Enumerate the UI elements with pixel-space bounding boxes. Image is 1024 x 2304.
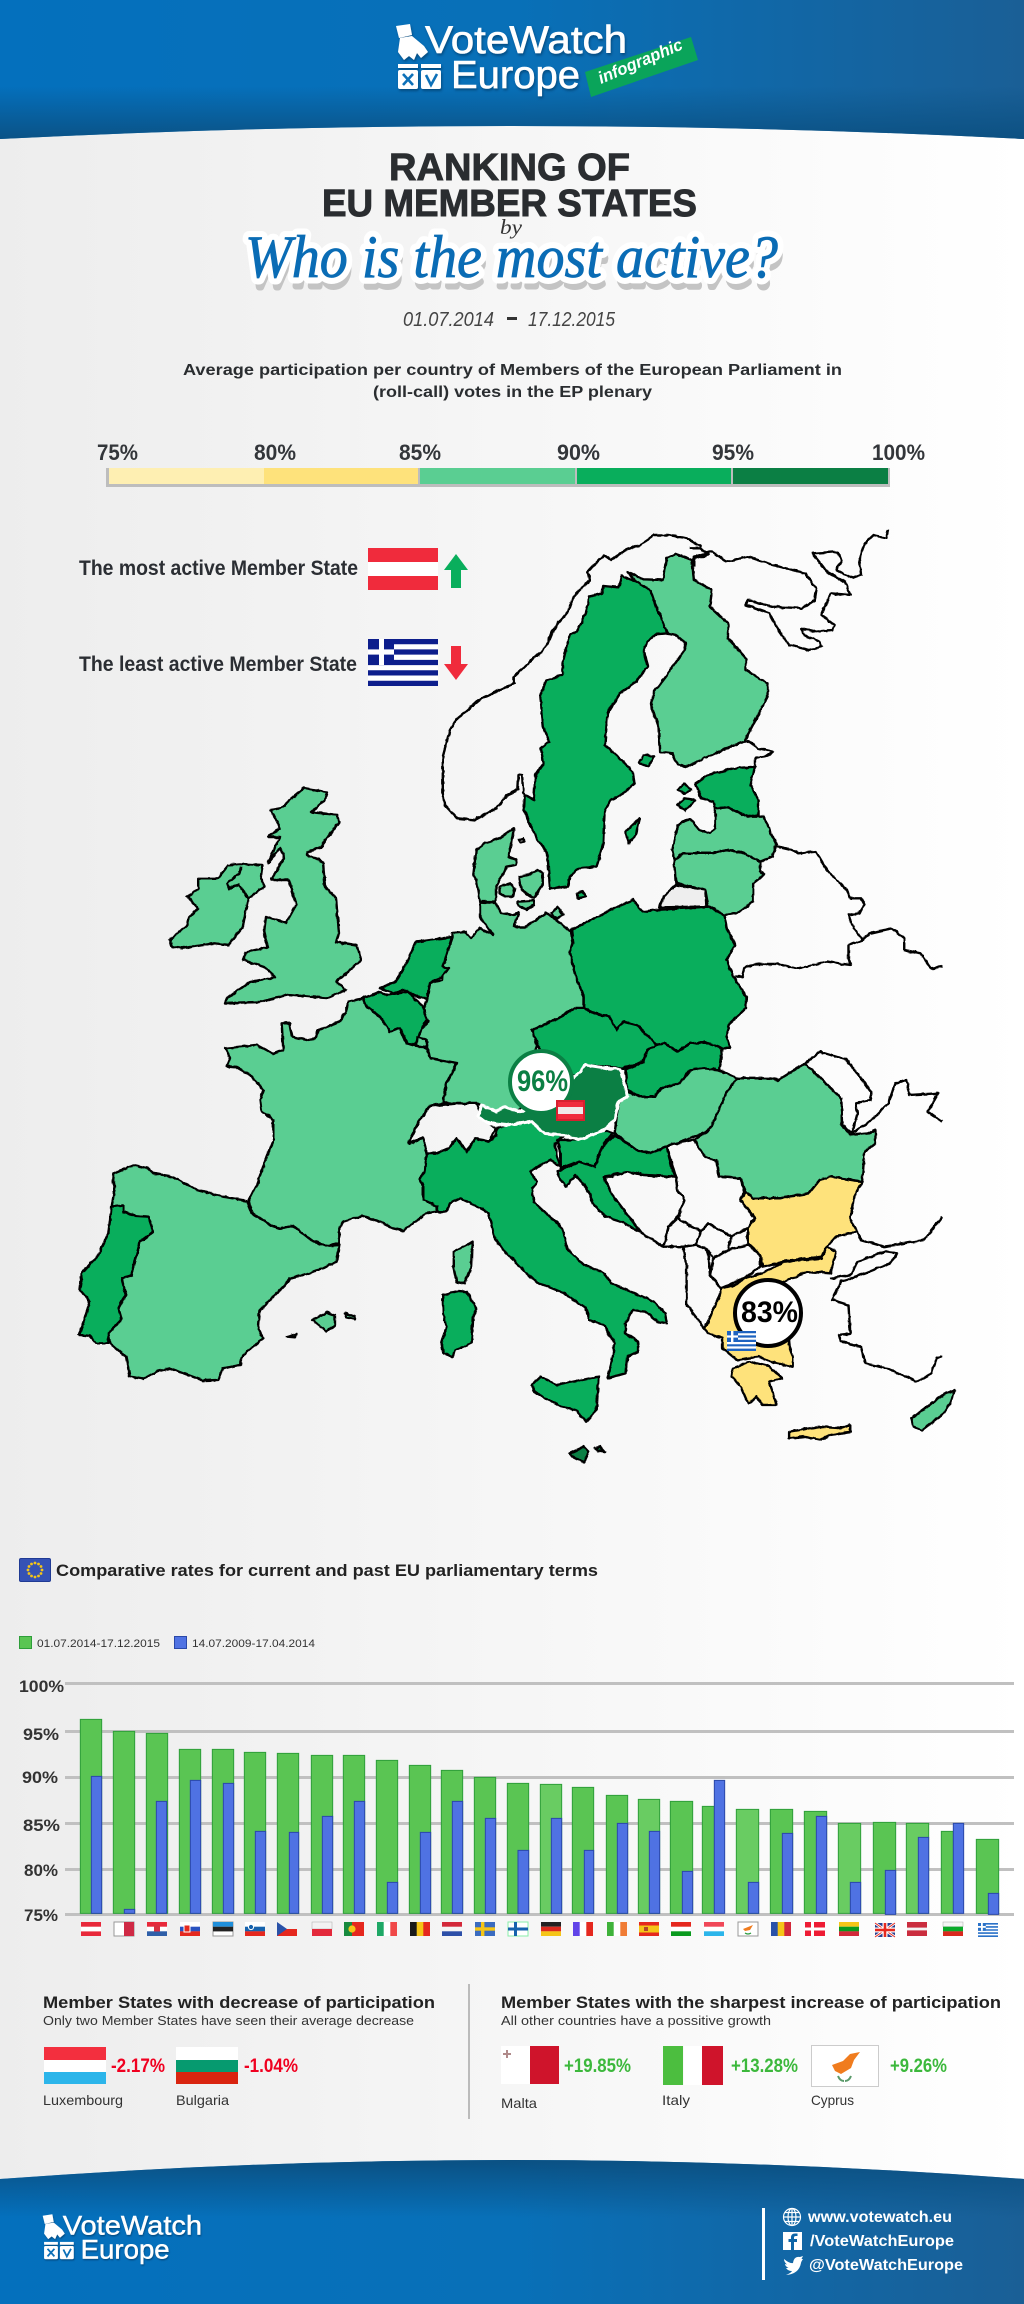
region: Peloponnese — [732, 1362, 782, 1405]
least active member state row — [79, 639, 468, 686]
value: Malta: +19.85% — [564, 2056, 631, 2077]
flag: Italy — [663, 2046, 723, 2085]
section heading: comparative rates — [20, 1558, 598, 1582]
footer contact: facebook: /VoteWatchEurope — [810, 2233, 954, 2250]
island: Rugen — [551, 907, 563, 918]
footer logo — [43, 2210, 202, 2264]
footer contact: twitter: @VoteWatchEurope — [809, 2257, 963, 2274]
island: Lolland — [518, 901, 534, 909]
flag: Cyprus — [812, 2046, 878, 2086]
island: Gozo — [595, 1447, 605, 1452]
territory: Kaliningrad — [660, 885, 706, 907]
country: Estonia — [696, 767, 759, 817]
subtitle: who is the most active: Who is the most active? — [245, 224, 778, 290]
non-member outline: Norway south coast — [443, 622, 560, 820]
country: Czech Republic — [532, 1008, 656, 1077]
icon: bird — [784, 2256, 803, 2275]
bars: left half — [80, 1719, 496, 1913]
country flags under bars — [81, 1922, 998, 1937]
scale labels: 85% — [399, 440, 441, 465]
country: Malta — [570, 1447, 589, 1462]
callout: Austria 96%: 96% — [517, 1065, 568, 1098]
axis labels — [19, 1677, 64, 1925]
island: Sardinia — [442, 1291, 477, 1357]
header band — [0, 0, 1024, 139]
country: Luxembourg — [416, 1037, 427, 1047]
flag: Austria — [368, 548, 438, 590]
country: Romania — [694, 1063, 875, 1198]
scale labels: 75% — [97, 440, 138, 465]
scale labels: 100% — [872, 440, 925, 465]
infographic tag: infographic — [595, 35, 686, 88]
scale labels: 90% — [557, 440, 600, 465]
country: Poland — [570, 900, 746, 1052]
country: Denmark — [473, 828, 517, 902]
axis labels: 95% — [23, 1725, 59, 1744]
country: Lithuania — [674, 850, 764, 915]
most active member state row: The most active Member State — [79, 557, 358, 580]
northern member states — [473, 554, 777, 1052]
flag: Bulgaria — [176, 2047, 238, 2084]
scale labels — [97, 440, 925, 465]
icon: hand over ballot boxes — [396, 24, 441, 89]
flag: Greece — [368, 639, 438, 686]
map of Europe — [79, 530, 955, 1462]
island: Aland — [639, 755, 654, 766]
scale labels: 80% — [254, 440, 296, 465]
flag: European Union — [20, 1558, 50, 1582]
country: Greece mainland — [705, 1247, 836, 1367]
icon: facebook — [783, 2232, 802, 2250]
small flag: Greece — [727, 1331, 756, 1351]
date range: 01.07.2014 — [403, 309, 494, 331]
country: Hungary — [615, 1068, 737, 1153]
island: Crete — [789, 1425, 850, 1440]
panel: decrease of participation — [43, 1994, 435, 2108]
most active member state row — [79, 548, 468, 590]
small flag: Austria — [556, 1100, 585, 1121]
central and south-eastern member states — [419, 1008, 955, 1462]
country: Switzerland outline — [408, 1103, 497, 1153]
island: Bornholm — [577, 892, 586, 898]
country: Austria (most active) — [478, 1065, 627, 1140]
colour scale legend — [97, 440, 925, 487]
label: Bulgaria: Bulgaria — [176, 2092, 229, 2108]
axis labels: 80% — [24, 1861, 58, 1880]
section heading: comparative rates: Comparative rates for current and past EU parliamentary terms — [56, 1562, 598, 1580]
flag: Luxembourg — [44, 2047, 106, 2084]
country: Slovakia — [625, 1043, 723, 1097]
arrow down — [444, 646, 468, 680]
country: Sweden — [524, 576, 668, 888]
label: Italy: Italy — [662, 2092, 690, 2108]
label: Cyprus: Cyprus — [811, 2092, 854, 2108]
country: Italy — [419, 1122, 667, 1378]
country: Finland — [627, 554, 768, 767]
logo word VoteWatch: VoteWatch — [425, 19, 627, 62]
arrow up — [444, 554, 468, 588]
label: Luxembourg: Luxembourg — [43, 2092, 123, 2108]
least active member state row: The least active Member State — [79, 653, 357, 676]
south-western member states — [79, 998, 497, 1381]
country: Portugal — [79, 1205, 153, 1343]
title connector: by: by — [500, 215, 523, 239]
panel: decrease of participation: Member States with decrease of participation — [43, 1994, 435, 2012]
scale labels: 95% — [712, 440, 754, 465]
island: Ibiza — [287, 1333, 296, 1337]
callout: Greece 83%: 83% — [741, 1296, 798, 1329]
panel: sharpest increase of participation: Member States with the sharpest increase of participation — [501, 1994, 1001, 2012]
flag: Malta — [501, 2046, 559, 2084]
chart description: (roll-call) votes in the EP plenary — [373, 384, 652, 401]
country: France — [226, 998, 457, 1246]
chart legend: 01.07.2014-17.12.2015 — [37, 1638, 160, 1650]
subtitle: who is the most active: Who is the most active? — [247, 233, 780, 299]
footer band — [0, 2160, 1024, 2304]
date range: 17.12.2015 — [528, 309, 616, 331]
country: Spain — [108, 1165, 339, 1381]
country: Latvia — [672, 807, 777, 862]
callout: Greece 83% — [727, 1280, 801, 1351]
panel: decrease of participation: Only two Member States have seen their average decrease — [43, 2013, 414, 2028]
infographic tag — [585, 35, 698, 97]
country: Germany — [417, 902, 584, 1112]
value: Cyprus: +9.26% — [890, 2056, 947, 2077]
bar chart — [19, 1677, 1014, 1937]
chart description — [183, 362, 842, 401]
bars: right half — [507, 1780, 999, 1914]
footer logo: Europe — [81, 2234, 170, 2264]
country: United Kingdom — [225, 788, 361, 1003]
callout: Austria 96% — [510, 1051, 585, 1121]
non-member outlines: north — [460, 530, 942, 977]
island: Menorca — [345, 1313, 355, 1319]
island: Mallorca — [312, 1313, 335, 1332]
island: Hiiumaa — [678, 783, 691, 793]
non-member outlines: Balkans — [604, 1052, 942, 1382]
title: ranking of EU member states: RANKING OF — [389, 147, 630, 189]
footer logo: VoteWatch — [63, 2210, 202, 2240]
label: Malta: Malta — [501, 2095, 537, 2111]
country: Belgium — [363, 992, 427, 1045]
title: ranking of EU member states: EU MEMBER STATES — [322, 183, 697, 225]
country: Slovenia — [557, 1130, 613, 1168]
header logo: VoteWatch Europe — [396, 19, 627, 97]
date range — [403, 309, 616, 331]
country: Netherlands — [380, 937, 452, 998]
value: Luxembourg: -2.17% — [111, 2056, 165, 2077]
island: Zealand — [519, 870, 543, 898]
panel: sharpest increase of participation: All other countries have a possitive growth — [501, 2013, 771, 2028]
axis labels: 90% — [22, 1768, 58, 1787]
subtitle: who is the most active: Who is the most active? — [245, 224, 778, 290]
chart legend: 14.07.2009-17.04.2014 — [192, 1638, 315, 1650]
western islands — [170, 864, 265, 948]
axis labels: 85% — [23, 1816, 60, 1835]
island: Sicily — [532, 1377, 598, 1422]
logo word Europe: Europe — [451, 54, 580, 97]
scale bar — [106, 468, 890, 487]
island: Corsica — [453, 1242, 473, 1283]
island: Gotland — [625, 818, 640, 843]
chart description: Average participation per country of Members of the European Parliament in — [183, 362, 842, 379]
footer contact: website: www.votewatch.eu — [807, 2209, 952, 2226]
country: Bulgaria — [741, 1177, 862, 1267]
axis labels: 75% — [24, 1906, 58, 1925]
chart legend — [20, 1636, 315, 1650]
island: Funen — [500, 883, 515, 897]
title: ranking of EU member states — [322, 147, 697, 225]
country: Ireland — [170, 864, 265, 948]
axis labels: 100% — [19, 1677, 64, 1696]
value: Italy: +13.28% — [731, 2056, 798, 2077]
island: Saaremaa — [678, 798, 696, 811]
country: Croatia — [557, 1135, 676, 1233]
country: Cyprus — [911, 1390, 955, 1430]
value: Bulgaria: -1.04% — [244, 2056, 298, 2077]
panel: sharpest increase of participation — [501, 1994, 1001, 2111]
icon: globe — [784, 2208, 800, 2226]
